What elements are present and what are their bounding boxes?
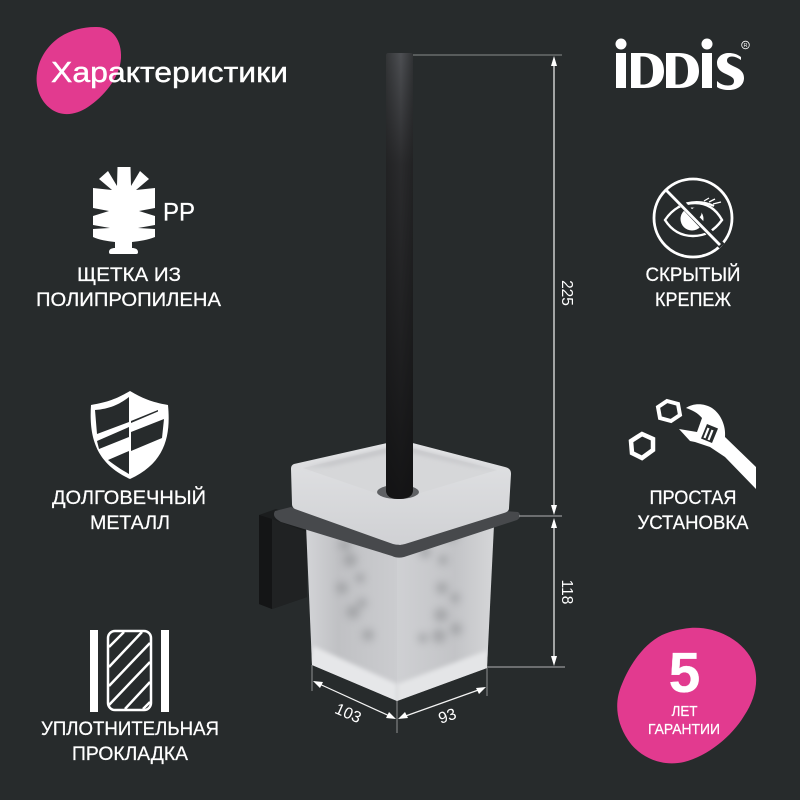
feature: hidden fastening — [646, 179, 740, 311]
product: toilet brush holder — [259, 53, 520, 705]
glass rim — [291, 440, 511, 545]
icon: gasket — [90, 630, 169, 712]
logo: IDDIS: R — [744, 43, 748, 49]
feature: durable metal: МЕТАЛЛ — [90, 512, 170, 534]
heading text: Характеристики — [51, 57, 288, 89]
metal shelf — [274, 507, 520, 558]
icon: nut large — [631, 434, 653, 458]
feature: sealing gasket: ПРОКЛАДКА — [72, 743, 188, 765]
wall mount plate — [259, 509, 307, 609]
heading blob — [37, 27, 121, 114]
warranty caption: ЛЕТ — [672, 704, 698, 720]
dimension: depth 93 — [398, 687, 486, 728]
heading: Характеристики — [37, 27, 288, 114]
warranty badge: ГАРАНТИИ — [648, 722, 720, 738]
caption: ПРОСТАЯ — [650, 487, 736, 509]
dimension: height 225 — [413, 55, 575, 515]
caption: ДОЛГОВЕЧНЫЙ — [52, 485, 206, 509]
badge blob — [617, 628, 756, 763]
caption: СКРЫТЫЙ — [646, 262, 740, 286]
feature: brush polypropylene: ПОЛИПРОПИЛЕНА — [36, 289, 221, 311]
feature: easy installation: УСТАНОВКА — [638, 512, 748, 534]
icon: adjustable wrench — [679, 404, 756, 489]
feature: sealing gasket — [41, 630, 219, 765]
dimension: height 118 — [487, 516, 575, 667]
icon: shield — [91, 391, 169, 479]
feature: durable metal — [52, 391, 206, 534]
caption: УПЛОТНИТЕЛЬНАЯ — [41, 718, 219, 740]
frosted glass cup — [306, 522, 494, 705]
icon: brush head — [93, 167, 155, 254]
dimension: width 103 — [312, 665, 487, 733]
dimension: height 225: 225 — [558, 280, 575, 306]
label: PP: PP — [163, 198, 195, 226]
dimension: height 118: 118 — [558, 580, 575, 604]
dimension: depth 93: 93 — [436, 706, 459, 728]
feature: easy installation — [631, 401, 756, 534]
dimension lines — [312, 55, 575, 733]
feature: brush polypropylene — [36, 167, 221, 311]
logo: IDDIS — [616, 38, 749, 90]
dimension: width 103: 103 — [332, 701, 364, 727]
warranty badge — [617, 628, 756, 763]
feature: hidden fastening: КРЕПЕЖ — [655, 289, 731, 311]
icon: nut small — [658, 401, 680, 421]
warranty number: 5 — [669, 641, 700, 705]
brush handle rod — [386, 53, 413, 499]
icon: crossed eye — [654, 179, 732, 257]
caption: ЩЕТКА ИЗ — [77, 264, 181, 286]
